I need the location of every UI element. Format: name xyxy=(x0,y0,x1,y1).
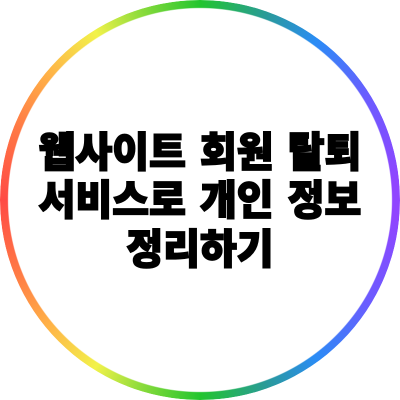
title line 2: 서비스로 개인 정보 xyxy=(39,179,361,223)
title line 1: 웹사이트 회원 탈퇴 xyxy=(39,131,361,175)
title line 3: 정리하기 xyxy=(126,228,274,272)
